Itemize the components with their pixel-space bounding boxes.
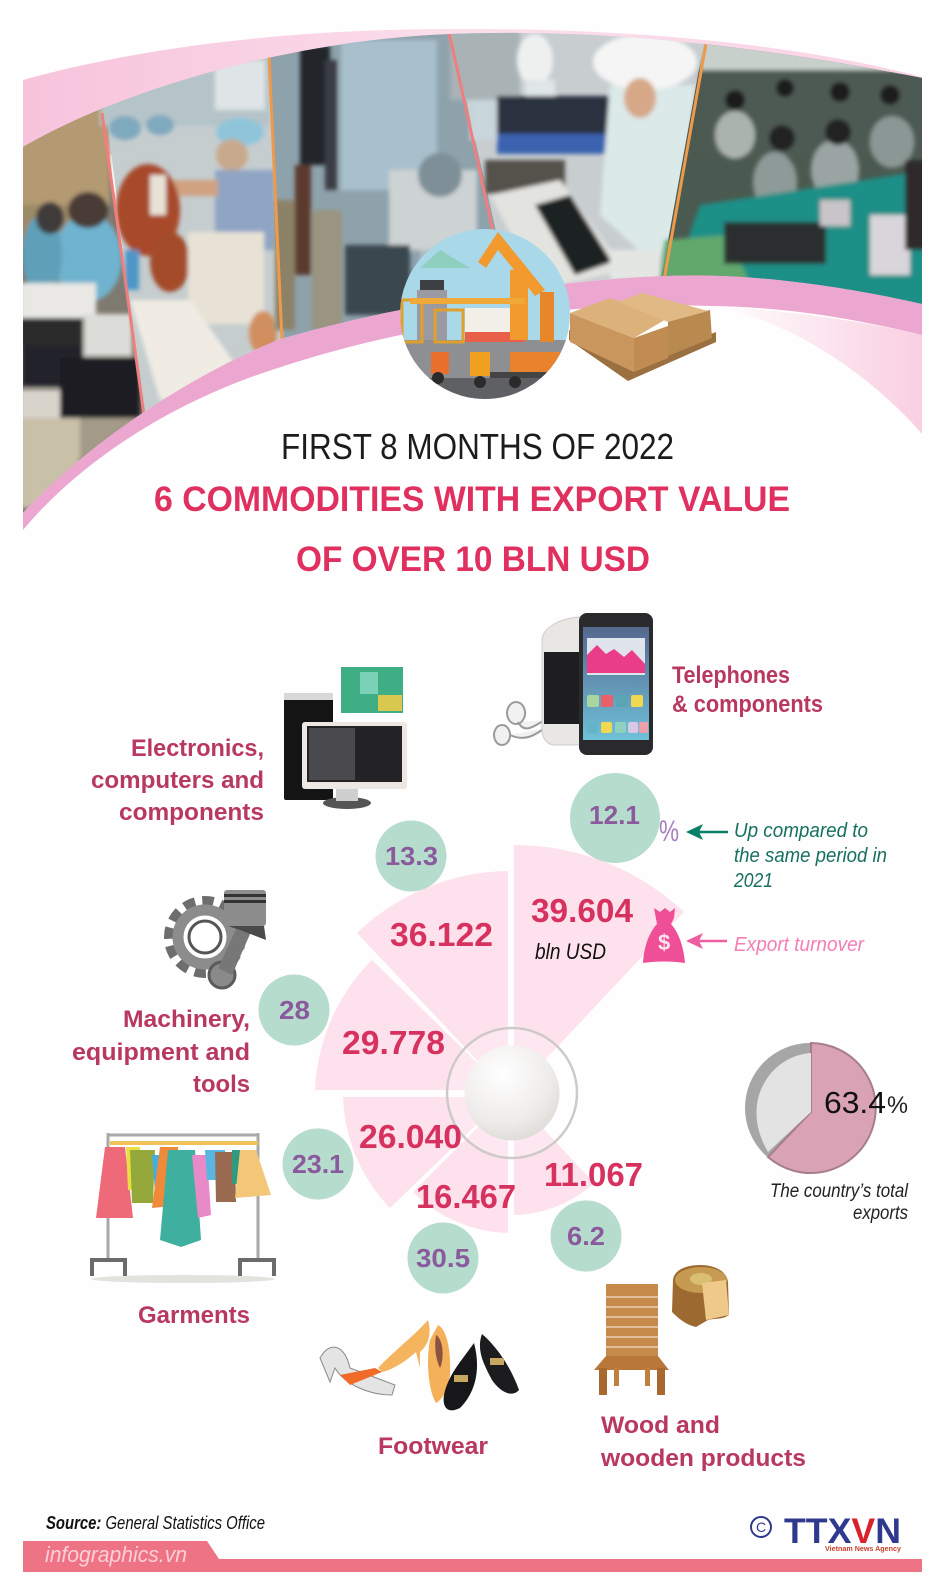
- label: electronics: [91, 735, 264, 826]
- sector: wood: [514, 1097, 594, 1215]
- label: telephones: & components: [672, 691, 823, 718]
- sector: machinery: [315, 960, 505, 1090]
- center hub: [447, 1028, 577, 1158]
- label: machinery: [72, 1006, 250, 1098]
- label: wood: [600, 1412, 806, 1472]
- icon: money bag: $: [658, 930, 670, 955]
- photo: garment workers: [98, 58, 284, 412]
- icon: shoes: [320, 1320, 519, 1410]
- growth badge 23.1: 23.1: [292, 1149, 344, 1179]
- heading: first 8 months: FIRST 8 MONTHS OF 2022: [281, 426, 674, 467]
- icon: cardboard boxes on pallet: [569, 293, 716, 381]
- sector: garments: [343, 1097, 505, 1208]
- arrow: pink: [686, 933, 727, 949]
- label: electronics: components: [119, 799, 264, 826]
- label: machinery: tools: [193, 1071, 250, 1098]
- growth badge 30.5: 30.5: [416, 1243, 470, 1273]
- legend: percent change: [659, 815, 887, 892]
- legend text: up compared: the same period in: [734, 845, 887, 867]
- legend text: up compared: Up compared to: [734, 820, 868, 842]
- arrow: green: [686, 824, 728, 840]
- heading: commodities line 1: 6 COMMODITIES WITH EXPORT VALUE: [154, 480, 790, 519]
- item: wood: [594, 1265, 806, 1472]
- icon: clothes rack: [91, 1133, 275, 1283]
- value: 16.467: 16.467: [416, 1178, 516, 1215]
- photo: footwear workers: [23, 106, 142, 513]
- sector: telephones: [514, 845, 684, 1093]
- growth badge 6.2: [550, 1200, 622, 1272]
- label: wood: Wood and: [601, 1412, 720, 1439]
- growth badge 28: [258, 974, 330, 1046]
- pink arc lower band: [23, 275, 922, 530]
- label: wood: wooden products: [600, 1445, 806, 1472]
- unit: bln USD: bln USD: [535, 939, 606, 964]
- light pink wedge: [712, 306, 922, 434]
- sector: footwear: [413, 1097, 508, 1233]
- label: machinery: Machinery,: [123, 1006, 250, 1033]
- footer bar: [23, 1541, 922, 1572]
- label: footwear: Footwear: [378, 1433, 488, 1460]
- value: 29.778: 29.778: [342, 1024, 445, 1061]
- pie disc: [745, 1043, 875, 1173]
- value: 36.122: 36.122: [390, 916, 493, 953]
- remaining share: [756, 1053, 811, 1152]
- legend text: up compared: 2021: [733, 870, 773, 892]
- growth badge 28: 28: [279, 995, 310, 1025]
- pie caption: exports: [853, 1203, 908, 1224]
- photo separators: [102, 32, 707, 415]
- pie value: 63.4: [824, 1085, 886, 1120]
- pie percent sign: %: [887, 1092, 908, 1119]
- pie chart: share of total exports: [745, 1043, 909, 1224]
- item: footwear: [320, 1320, 519, 1460]
- legend text: export turnover: Export turnover: [734, 934, 865, 956]
- pie caption: [770, 1181, 909, 1224]
- sector: electronics: [357, 871, 508, 1093]
- icon: gear and piston: [170, 890, 266, 988]
- heading: commodities line 2: OF OVER 10 BLN USD: [296, 540, 650, 579]
- value: 26.040: 26.040: [359, 1118, 462, 1155]
- growth badge 12.1: 12.1: [589, 800, 640, 830]
- label: garments: Garments: [138, 1302, 250, 1329]
- item: garments: [91, 1133, 275, 1329]
- icon: money bag: [643, 908, 685, 963]
- growth badge 13.3: [376, 820, 446, 892]
- footer: [23, 1512, 922, 1572]
- site name: infographics.vn: [45, 1542, 187, 1567]
- photo: machinery: [269, 34, 496, 338]
- icon: computer and circuit board: [284, 667, 407, 809]
- logo: C: [756, 1519, 766, 1535]
- logo: TTXVN: [784, 1512, 901, 1551]
- logo: Vietnam News Agency: [825, 1546, 901, 1553]
- legend text: up compared: [733, 820, 887, 892]
- icon: smartphones and earphones: [494, 613, 653, 755]
- label: machinery: equipment and: [72, 1039, 250, 1066]
- growth badge 30.5: [408, 1222, 478, 1294]
- growth badge 13.3: 13.3: [385, 841, 438, 871]
- label: electronics: computers and: [91, 767, 264, 794]
- growth badge 23.1: [282, 1128, 354, 1200]
- header banner with photos: [15, 25, 930, 530]
- value: 11.067: 11.067: [544, 1156, 643, 1193]
- label: telephones: Telephones: [672, 662, 790, 689]
- photo collage: [15, 25, 930, 530]
- icon: wooden chair and stump: [594, 1265, 729, 1395]
- label: electronics: Electronics,: [131, 735, 264, 762]
- pink arc top band: [23, 29, 922, 160]
- growth badge 6.2: 6.2: [567, 1221, 605, 1251]
- source line: Source: General Statistics Office: [46, 1513, 265, 1533]
- item: machinery: [72, 890, 266, 1098]
- photo: electronics assembly: [449, 32, 702, 284]
- pink share: [768, 1043, 876, 1173]
- label: telephones: [672, 662, 823, 718]
- pie caption: The country’s total: [770, 1181, 909, 1202]
- title: [154, 426, 790, 579]
- radial sector chart: [315, 845, 684, 1233]
- legend: export turnover: [643, 908, 865, 963]
- icon: port circle: [400, 229, 570, 405]
- item: electronics: [91, 667, 407, 826]
- photo: phone assembly line: [658, 44, 922, 304]
- value: 39.604: 39.604: [531, 892, 634, 929]
- percent sign: %: [659, 815, 679, 848]
- item: telephones: [494, 613, 823, 755]
- growth badge 12.1: [570, 773, 660, 863]
